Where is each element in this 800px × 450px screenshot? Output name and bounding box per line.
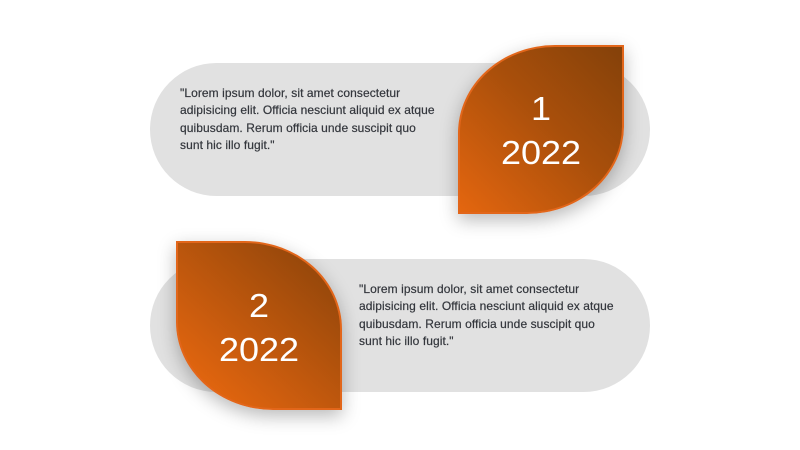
text block: item 1 description: adipisicing elit. Officia nesciunt aliquid ex atque — [180, 103, 435, 117]
text block: item 2 description: adipisicing elit. Officia nesciunt aliquid ex atque — [359, 299, 614, 313]
panel: item 1 background pill — [150, 63, 650, 196]
text block: item 2 description — [359, 282, 614, 348]
text block: item 2 description: quibusdam. Rerum officia unde suscipit quo — [359, 317, 595, 331]
text block: item 1 description: "Lorem ipsum dolor, sit amet consectetur — [180, 86, 400, 100]
item 2 year: 2022 — [219, 332, 299, 369]
text block: item 1 description: quibusdam. Rerum officia unde suscipit quo — [180, 121, 416, 135]
item 1 year: 2022 — [501, 135, 581, 172]
item 2 number: 2 — [249, 288, 269, 325]
panel: item 1 orange leaf badge — [458, 45, 624, 214]
text block: item 2 description: "Lorem ipsum dolor, sit amet consectetur — [359, 282, 579, 296]
panel: item 2 background pill — [150, 259, 650, 392]
text block: item 2 description: sunt hic illo fugit." — [359, 334, 454, 348]
panel: item 2 orange leaf badge — [176, 241, 342, 410]
item 1 number: 1 — [531, 91, 551, 128]
text block: item 1 description: sunt hic illo fugit." — [180, 138, 275, 152]
text block: item 1 description — [180, 86, 435, 152]
